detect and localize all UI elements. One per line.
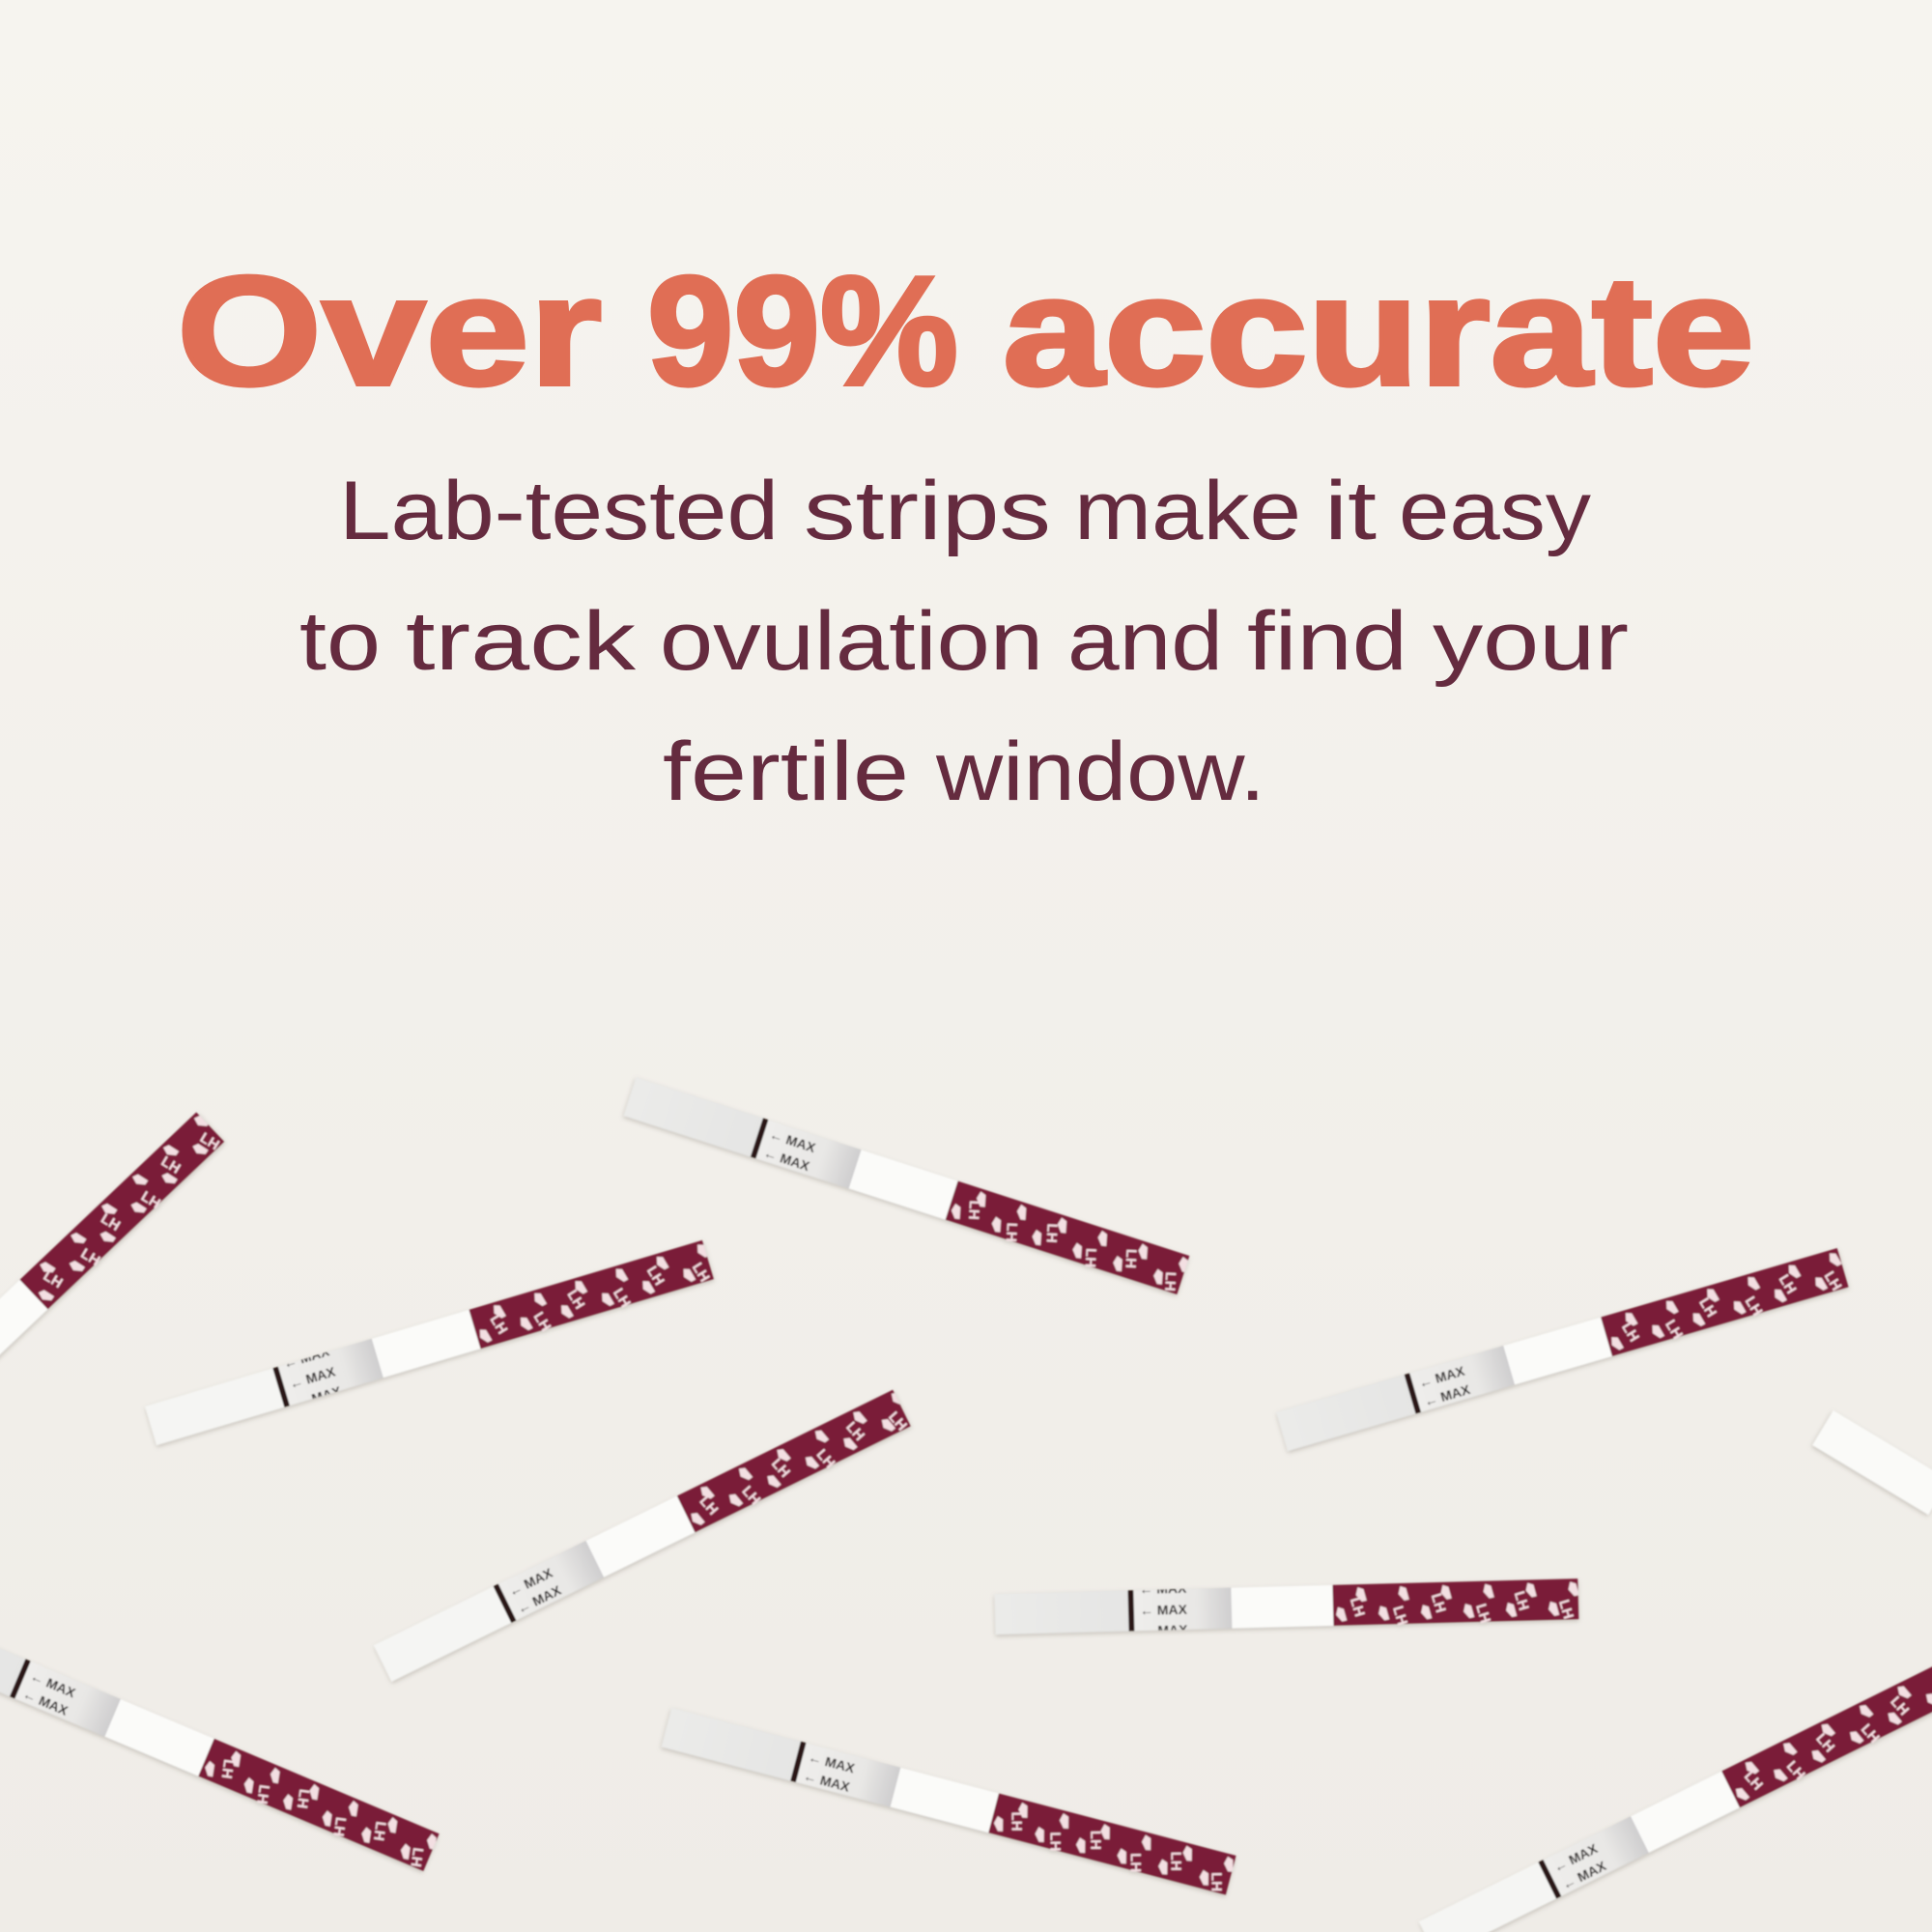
crimson LH band: LH (158, 1153, 184, 1178)
crimson LH band: LH (1812, 1730, 1837, 1756)
crimson LH band: LH (813, 1446, 838, 1471)
crimson LH band: LH (487, 1312, 511, 1337)
MAX labels: ← MAX (28, 1668, 78, 1701)
MAX labels (765, 1134, 816, 1172)
MAX labels (1557, 1843, 1607, 1888)
crimson LH band: LH (1161, 1271, 1179, 1292)
crimson LH band: LH (1695, 1295, 1719, 1321)
strip: centre left, steep (374, 1389, 913, 1685)
crimson LH band: LH (1428, 1591, 1449, 1614)
crimson LH band (1601, 1248, 1850, 1359)
crimson LH band: LH (1887, 1693, 1912, 1719)
crimson LH band: LH (738, 1483, 763, 1508)
MAX labels (1142, 1588, 1188, 1632)
crimson LH band: LH (1087, 1831, 1103, 1850)
crimson LH band (469, 1240, 715, 1351)
strip: bottom centre (661, 1708, 1236, 1898)
strip: upper right (1276, 1248, 1850, 1454)
subtitle text block: strips (804, 465, 1051, 557)
MAX labels: ← MAX (807, 1749, 857, 1776)
strip: upper left (142, 1232, 716, 1453)
MAX labels: ← MAX (514, 1581, 564, 1617)
crimson LH band: LH (197, 1129, 222, 1153)
crimson LH band (677, 1389, 913, 1535)
subtitle text block: find (1247, 595, 1407, 688)
crimson LH band: LH (98, 1210, 123, 1235)
MAX labels: ← MAX (1416, 1363, 1467, 1391)
crimson LH band: LH (610, 1286, 634, 1311)
subtitle text block: easy (1399, 465, 1591, 557)
crimson LH band: LH (1821, 1268, 1845, 1293)
crimson LH band (19, 1112, 226, 1312)
crimson LH band: LH (1783, 1758, 1808, 1783)
subtitle text block: to (299, 595, 381, 688)
crimson LH band (1721, 1662, 1932, 1810)
crimson LH band: LH (253, 1783, 272, 1805)
crimson LH band: LH (370, 1820, 389, 1842)
crimson LH band: LH (1618, 1320, 1642, 1345)
MAX labels (512, 1567, 562, 1612)
crimson LH band: LH (1046, 1832, 1064, 1851)
crimson LH band: LH (885, 1408, 910, 1435)
strip: lower left, running off left edge (0, 1648, 440, 1874)
crimson LH band: LH (294, 1788, 312, 1809)
crimson LH band: LH (1008, 1812, 1025, 1832)
crimson LH band: LH (643, 1264, 668, 1289)
subtitle text block (299, 465, 1629, 818)
title: accurate (1003, 244, 1754, 418)
subtitle text block: make (1074, 465, 1301, 557)
MAX labels: ← MAX (1139, 1580, 1187, 1597)
crimson LH band: LH (41, 1267, 66, 1292)
test strips group (0, 1077, 1932, 1932)
title: Over (177, 244, 602, 418)
crimson LH band: LH (1741, 1768, 1766, 1794)
MAX labels: ← MAX (1559, 1858, 1609, 1892)
crimson LH band (945, 1181, 1189, 1297)
MAX labels: ← MAX (1422, 1381, 1472, 1409)
MAX labels: ← MAX (20, 1686, 71, 1719)
crimson LH band: LH (563, 1287, 587, 1312)
strip: top centre (623, 1077, 1189, 1297)
crimson LH band: LH (1043, 1223, 1061, 1243)
MAX labels: ← MAX (287, 1363, 338, 1392)
crimson LH band: LH (1662, 1317, 1686, 1342)
crimson LH band: LH (1511, 1589, 1532, 1612)
crimson LH band: LH (1167, 1852, 1184, 1871)
crimson LH band: LH (1555, 1598, 1577, 1621)
crimson LH band: LH (218, 1758, 237, 1779)
crimson LH band: LH (696, 1493, 721, 1519)
strip: bottom right, running off the corner (1419, 1662, 1932, 1932)
crimson LH band: LH (1347, 1596, 1368, 1619)
crimson LH band: LH (1127, 1853, 1144, 1872)
crimson LH band: LH (1003, 1222, 1020, 1242)
crimson LH band: LH (1776, 1272, 1800, 1296)
crimson LH band: LH (1208, 1872, 1224, 1891)
MAX labels (25, 1677, 76, 1716)
MAX labels (286, 1351, 340, 1400)
crimson LH band (987, 1794, 1236, 1898)
crimson LH band: LH (768, 1456, 793, 1481)
MAX labels (806, 1756, 856, 1793)
strip: top left, running off left edge (0, 1112, 226, 1545)
crimson LH band: LH (407, 1847, 426, 1868)
crimson LH band: LH (78, 1245, 102, 1269)
subtitle text block: ovulation (660, 595, 1043, 688)
subtitle text block: window. (935, 725, 1265, 818)
MAX labels: ← MAX (293, 1382, 344, 1411)
subtitle text block: Lab-tested (339, 465, 779, 557)
crimson LH band: LH (1858, 1721, 1883, 1747)
crimson LH band: LH (965, 1200, 982, 1220)
MAX labels: ← MAX (1140, 1602, 1188, 1618)
crimson LH band: LH (689, 1260, 713, 1285)
crimson LH band: LH (138, 1188, 163, 1212)
MAX labels (1422, 1366, 1471, 1406)
MAX labels: ← MAX (762, 1145, 812, 1174)
title (177, 244, 1754, 418)
MAX labels: ← MAX (768, 1126, 818, 1155)
MAX labels: ← MAX (1140, 1622, 1188, 1638)
crimson LH band (197, 1739, 440, 1874)
crimson LH band: LH (1472, 1602, 1493, 1625)
MAX labels: ← MAX (506, 1564, 555, 1600)
crimson LH band (1332, 1578, 1578, 1629)
crimson LH band: LH (1082, 1248, 1099, 1268)
crimson LH band: LH (530, 1309, 554, 1334)
MAX labels: ← MAX (802, 1768, 852, 1795)
MAX labels: ← MAX (1550, 1840, 1601, 1875)
strip: centre, near horizontal (993, 1577, 1580, 1638)
subtitle text block: it (1324, 465, 1377, 557)
title: 99% (647, 244, 958, 418)
subtitle text block: fertile (663, 725, 909, 818)
subtitle text block: track (406, 595, 637, 688)
crimson LH band: LH (842, 1419, 867, 1444)
subtitle text block: and (1067, 595, 1223, 688)
crimson LH band: LH (1389, 1605, 1410, 1628)
strip: right edge, white end only (1812, 1410, 1932, 1515)
crimson LH band: LH (1122, 1249, 1139, 1268)
crimson LH band: LH (1742, 1293, 1766, 1319)
crimson LH band: LH (329, 1816, 349, 1837)
subtitle text block: your (1433, 595, 1629, 688)
MAX labels: ← MAX (281, 1343, 331, 1372)
